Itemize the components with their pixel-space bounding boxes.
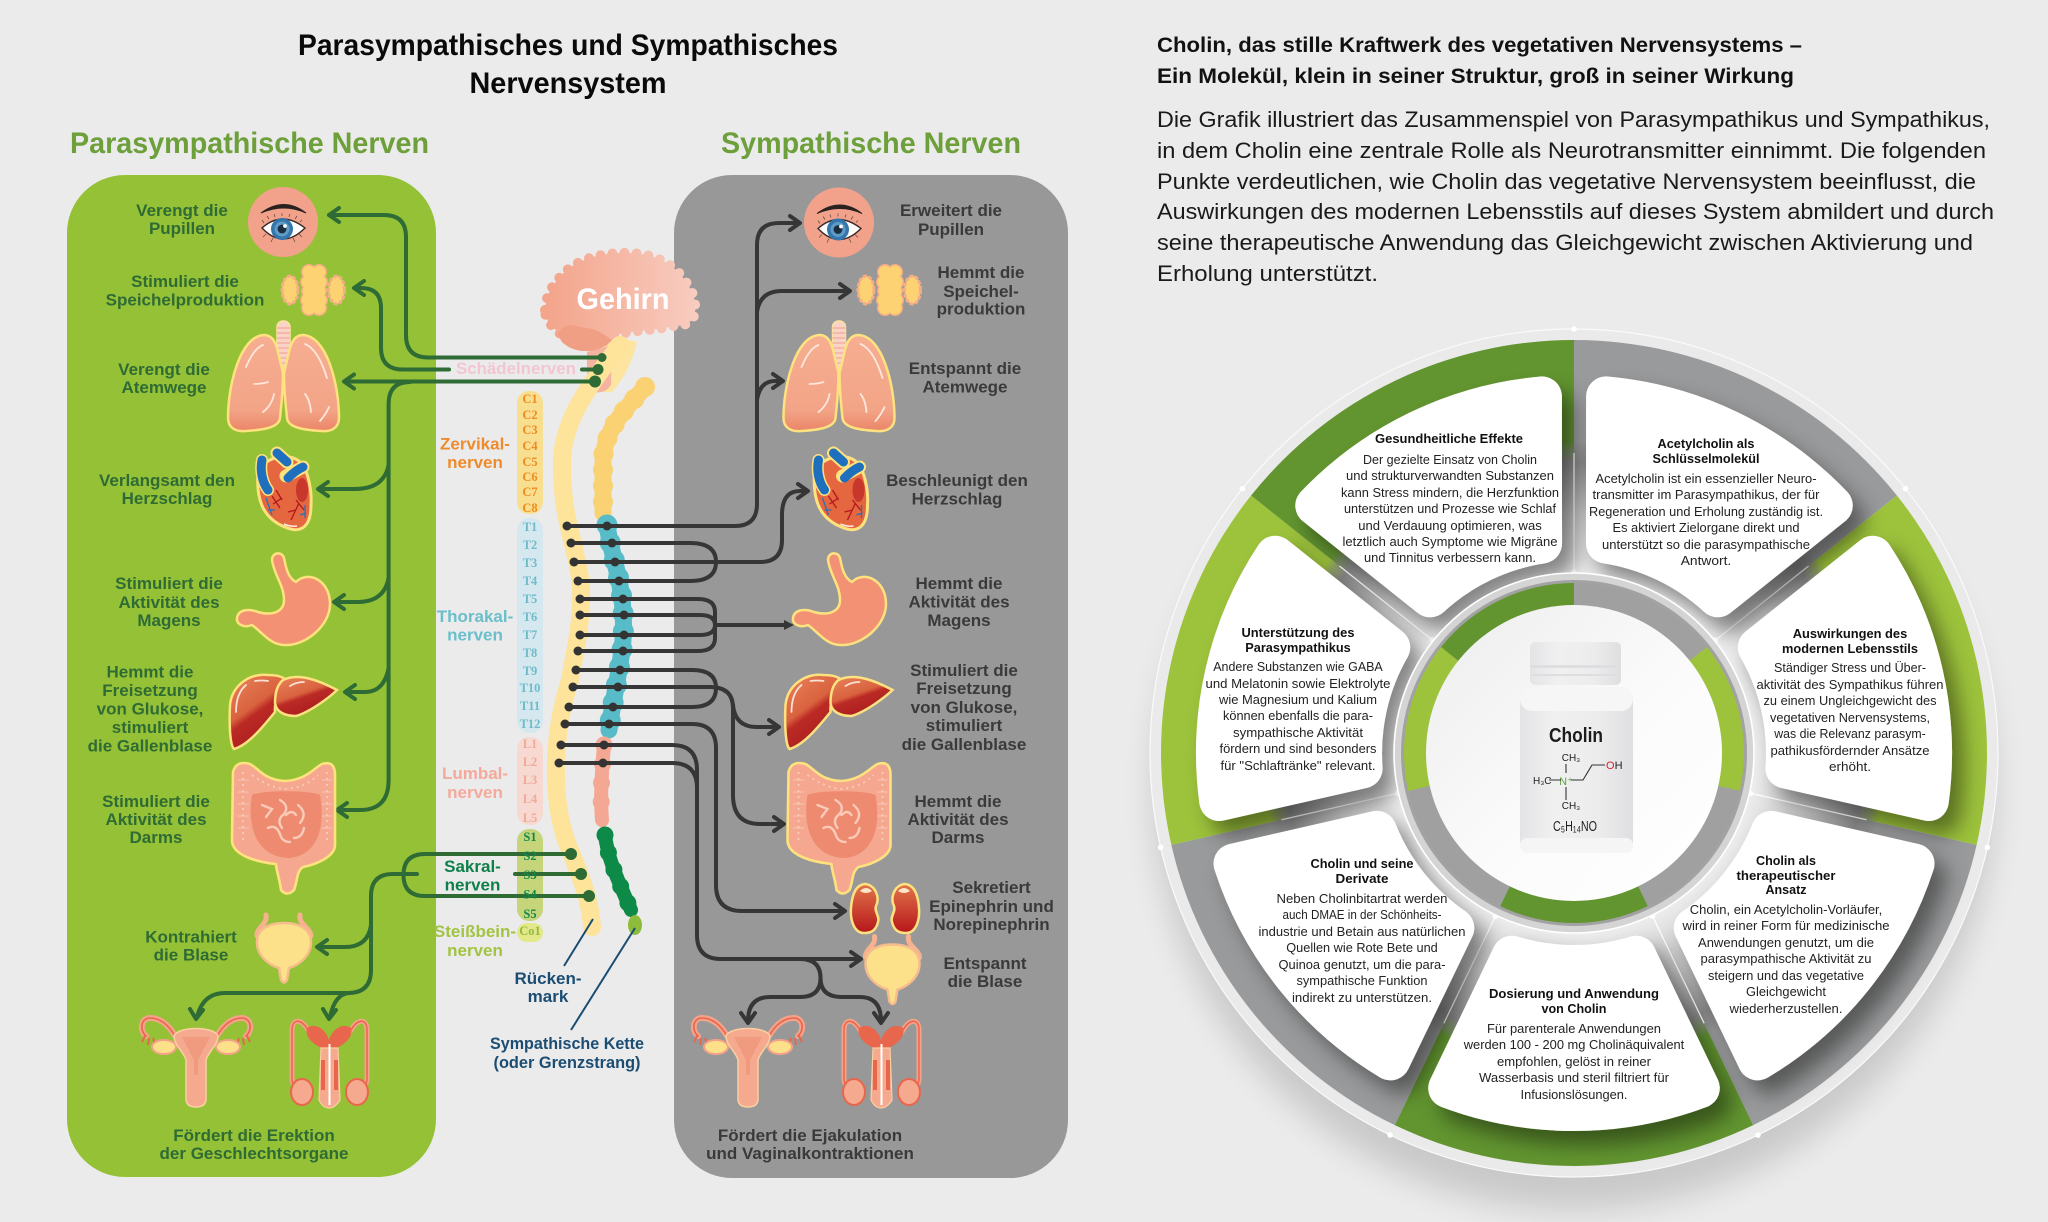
- organ: right stomach: [793, 553, 886, 645]
- card: Cholin als therapeutischer Ansatz: Gleichgewicht: [1746, 984, 1826, 999]
- organ: right eye: [804, 188, 874, 258]
- intro paragraph: Die Grafik illustriert das Zusammenspiel von Parasympathikus und Sympathikus,: [1157, 107, 1990, 132]
- wheel shadow: [1154, 370, 1994, 1210]
- block: thoracic segments: T11: [520, 699, 540, 713]
- card: Cholin und seine Derivate: Quinoa genutzt, um die para-: [1278, 957, 1446, 972]
- card: Auswirkungen: pathikusfördernder Ansätze: [1770, 743, 1930, 758]
- card: Cholin und seine Derivate: indirekt zu unterstützen.: [1292, 990, 1432, 1005]
- card: Dosierung: Dosierung und Anwendung: [1489, 986, 1659, 1001]
- label: Hemmt Speichelproduktion: Hemmt die: [938, 263, 1024, 282]
- block: cervical segments: C6: [522, 470, 538, 484]
- sympathetic branch: saliva: [757, 284, 850, 312]
- card: Dosierung: Infusionslösungen.: [1520, 1087, 1628, 1102]
- label: Steißbeinnerven: Steißbein-: [434, 922, 516, 941]
- card: Unterstützung: Unterstützung des: [1242, 625, 1354, 640]
- organ: left eye: [248, 187, 318, 257]
- label: Stimuliert Magen: Magens: [137, 611, 201, 630]
- intro paragraph: seine therapeutische Anwendung das Gleichgewicht zwischen Aktivierung und: [1157, 230, 1973, 255]
- block: thoracic segments: T4: [523, 574, 538, 588]
- label: Stimuliert Darm: Darms: [130, 828, 182, 847]
- label: Hemmt Glukose: von Glukose,: [97, 699, 203, 718]
- sympathetic chain: thoracic: [607, 525, 623, 730]
- block: thoracic segments: T1: [523, 520, 537, 534]
- organ: right intestine: [788, 763, 890, 894]
- sympathetic loop: T5-T8: [578, 599, 715, 651]
- organ: right salivary glands: [858, 264, 920, 316]
- sympathetic loop: T9-T11: [569, 670, 716, 707]
- label: Hemmt Darm: Darms: [932, 828, 984, 847]
- label: Fördert die Erektion: Fördert die Erektion: [173, 1126, 335, 1145]
- label: Lumbalnerven: nerven: [447, 783, 503, 802]
- card: Dosierung: von Cholin: [1542, 1001, 1607, 1016]
- intro paragraph: Punkte verdeutlichen, wie Cholin das vegetative Nervensystem beeinflusst, die: [1157, 169, 1976, 194]
- card: Gesundheitliche Effekte: Gesundheitliche Effekte: [1375, 431, 1523, 446]
- right heading: [1157, 34, 1802, 88]
- right labels: [706, 201, 1054, 1163]
- organ: right bladder: [865, 936, 920, 1004]
- card: Dosierung: [1463, 986, 1685, 1102]
- pointer: spinal cord: [564, 919, 593, 966]
- label: Sekretiert Epinephrin: Epinephrin und: [929, 897, 1054, 916]
- sympathetic nerve: T10 to intestine: [573, 687, 784, 831]
- label: Verengt die Atemwege: Atemwege: [121, 378, 207, 397]
- label: Lumbalnerven: Lumbal-: [442, 764, 508, 783]
- block: cervical segments: C4: [522, 439, 538, 453]
- hub ring: [1394, 573, 1754, 933]
- pointer: sympathetic chain: [571, 928, 635, 1030]
- block: cervical segments: C2: [522, 408, 538, 422]
- segment labels: sacral: [519, 830, 541, 938]
- card: Acetylcholin: Regeneration und Erholung zuständig ist.: [1589, 504, 1823, 519]
- organ: right liver: [785, 675, 892, 749]
- label: Stimuliert Glukose: Stimuliert die: [910, 661, 1018, 680]
- card: Auswirkungen: modernen Lebensstils: [1782, 641, 1918, 656]
- hub shadow: [1401, 580, 1747, 926]
- card: Acetylcholin: transmitter im Parasympathikus, der für: [1592, 487, 1820, 502]
- sympathetic loop: T2-T4: [571, 543, 716, 581]
- label: Hemmt Glukose: die Gallenblase: [88, 737, 212, 756]
- wheel channels: [1262, 441, 1886, 1065]
- card: Cholin und seine Derivate: Neben Cholinbitartrat werden: [1276, 891, 1448, 906]
- label: Entspannt die Atemwege: Entspannt die: [909, 359, 1021, 378]
- label: Thorakalnerven: nerven: [447, 626, 503, 645]
- block: thoracic segments: T6: [523, 610, 537, 624]
- sympathetic branch: liver: [733, 705, 779, 734]
- block: lumbar segments: [517, 737, 543, 825]
- parasympathetic branch: stomach: [334, 578, 389, 609]
- label: Sympathische Kette: [490, 1034, 644, 1072]
- card: Acetylcholin: Es aktiviert Zielorgane direkt und: [1612, 520, 1800, 535]
- title: Parasympathisches und Sympathisches: [298, 29, 838, 62]
- label: Kontrahiert die Blase: Kontrahiert: [145, 928, 237, 946]
- wheel cards: [1197, 376, 1951, 1111]
- bottle label: Cholin: Cholin: [1549, 725, 1603, 747]
- choline structure: CH₃: [1562, 753, 1580, 764]
- card: Unterstützung: wie Magnesium und Kalium: [1218, 692, 1377, 707]
- segment labels: sacral: S1: [523, 830, 537, 844]
- label: Verengt die Pupillen: Pupillen: [149, 219, 215, 238]
- sacral branch: male organ: [323, 993, 350, 1019]
- right heading: Cholin, das stille Kraftwerk des vegetativen Nervensystems –: [1157, 34, 1802, 57]
- sympathetic chain: sacral: [605, 835, 631, 910]
- label: Zervikalnerven: Zervikal-: [440, 434, 510, 454]
- label: Verlangsamt den Herzschlag: Herzschlag: [122, 489, 212, 508]
- label: Fördert die Erektion: der Geschlechtsorgane: [160, 1144, 348, 1163]
- block: thoracic segments: [517, 518, 543, 733]
- intro paragraph: in dem Cholin eine zentrale Rolle als Neurotransmitter einnimmt. Die folgenden: [1157, 138, 1986, 163]
- label: Sympathische Kette: (oder Grenzstrang): [494, 1053, 640, 1072]
- label: Rückenmark: Rücken-: [514, 969, 582, 988]
- block: cervical segments: C8: [522, 501, 538, 515]
- card: Cholin als therapeutischer Ansatz: parasympathische Aktivität zu: [1700, 951, 1872, 966]
- label: Fördert die Ejakulation: Fördert die Ejakulation: [718, 1126, 902, 1145]
- organ: left uterus: [142, 1018, 250, 1107]
- organ: left male reproductive organs: [291, 1021, 368, 1108]
- card: Auswirkungen: erhöht.: [1829, 759, 1871, 774]
- sympathetic nerve: T3 to heart: [574, 484, 808, 562]
- card: Acetylcholin: Acetylcholin ist ein essenzieller Neuro-: [1596, 471, 1816, 486]
- block: thoracic segments: T10: [520, 681, 540, 695]
- label: Stimuliert die Speichelproduktion: Speichelproduktion: [106, 290, 264, 310]
- heading: parasympathetic nerves: Parasympathische Nerven: [70, 127, 429, 160]
- label: Sekretiert Epinephrin: Norepinephrin: [933, 915, 1050, 934]
- card: Cholin und seine Derivate: sympathische Funktion: [1296, 973, 1428, 988]
- sympathetic chain: ganglion impar: [628, 915, 642, 935]
- label: Stimuliert Darm: Stimuliert die: [102, 792, 210, 811]
- card: Cholin als therapeutischer Ansatz: wiederherzustellen.: [1728, 1001, 1842, 1016]
- sacral nerve dots: [566, 848, 594, 902]
- card: Cholin als therapeutischer Ansatz: steigern und das vegetative: [1708, 968, 1864, 983]
- card: Gesundheitliche Effekte: unterstützen und Prozesse wie Schlaf: [1344, 501, 1556, 516]
- icon: brain: [545, 253, 695, 392]
- wheel diagram: [1099, 243, 2048, 1222]
- sympathetic nerve: to stomach: [715, 620, 794, 630]
- segment labels: sacral: S2: [523, 849, 537, 863]
- sympathetic branch: male organ: [820, 978, 888, 1023]
- block: cervical segments: C7: [522, 485, 538, 499]
- card: Cholin als therapeutischer Ansatz: Cholin als: [1756, 853, 1816, 868]
- segment labels: sacral: S5: [523, 907, 537, 921]
- label: Stimuliert Darm: Aktivität des: [105, 810, 207, 829]
- organ: left heart: [258, 453, 311, 530]
- label: Stimuliert Magen: Stimuliert die: [115, 574, 223, 593]
- block: thoracic segments: T5: [523, 592, 537, 606]
- card: Auswirkungen: [1756, 626, 1944, 774]
- choline structure: [1533, 753, 1623, 812]
- card: Cholin und seine Derivate: Quellen wie Rote Bete und: [1286, 940, 1438, 955]
- block: thoracic segments: T9: [523, 664, 537, 678]
- organ: left bladder: [257, 915, 311, 982]
- hub segments: [1379, 543, 1790, 964]
- organ: left lungs: [228, 321, 339, 431]
- label: Thorakalnerven: Thorakal-: [437, 607, 513, 626]
- intro paragraph: Erholung unterstützt.: [1157, 261, 1378, 286]
- choline structure: H₃C: [1533, 776, 1552, 787]
- card: Dosierung: Für parenterale Anwendungen: [1487, 1021, 1661, 1036]
- card: Gesundheitliche Effekte: und Verdauung optimieren, was: [1358, 518, 1542, 533]
- card: Unterstützung: für "Schlaftränke" relevant.: [1220, 758, 1376, 773]
- card: Unterstützung: können ebenfalls die para-: [1223, 708, 1373, 723]
- wheel spokes: [1157, 326, 1991, 1139]
- label: Sympathische Kette: Sympathische Kette: [490, 1034, 644, 1053]
- card: Unterstützung: [1206, 625, 1390, 773]
- sympathetic nerve: T1 to pupils: [567, 216, 800, 526]
- organ: right male reproductive organs: [843, 1021, 920, 1108]
- label: Sekretiert Epinephrin: Sekretiert: [952, 878, 1031, 897]
- block: lumbar segments: L5: [523, 811, 537, 825]
- card: Unterstützung: sympathische Aktivität: [1233, 725, 1363, 740]
- card: Auswirkungen: aktivität des Sympathikus führen: [1756, 677, 1944, 692]
- segment labels: sacral: Co1: [519, 924, 541, 938]
- parasympathetic nerve: airways: [344, 374, 595, 388]
- sacral nerve: S3 stub: [515, 872, 581, 876]
- organ: right uterus: [694, 1018, 802, 1107]
- block: thoracic segments: T3: [523, 556, 537, 570]
- label: Stimuliert Glukose: Freisetzung: [916, 679, 1012, 698]
- label: Verlangsamt den Herzschlag: Verlangsamt den: [99, 471, 235, 490]
- sacral nerves: loop: [404, 854, 589, 896]
- hub center: [1426, 605, 1722, 901]
- label: Hemmt Glukose: Freisetzung: [102, 681, 198, 700]
- block: thoracic segments: T2: [523, 538, 537, 552]
- label: Beschleunigt den Herzschlag: Beschleunigt den: [886, 471, 1028, 490]
- label: Erweitert die Pupillen: Erweitert die: [900, 201, 1002, 220]
- wheel outer ring: [1150, 329, 1998, 1177]
- card: Dosierung: empfohlen, gelöst in reiner: [1497, 1054, 1652, 1069]
- card: Acetylcholin: [1589, 436, 1823, 568]
- block: lumbar segments: L1: [523, 737, 537, 751]
- sympathetic branch: airways: [757, 374, 783, 400]
- wheel band segments: [1099, 243, 2048, 1222]
- card: Cholin als therapeutischer Ansatz: Anwendungen genutzt, um die: [1698, 935, 1874, 950]
- label: Stimuliert Glukose: stimuliert: [926, 716, 1003, 735]
- block: cervical segments: C1: [522, 392, 538, 406]
- label: Hemmt Magen: Hemmt die: [916, 574, 1002, 593]
- label: Hemmt Speichelproduktion: Speichel-: [943, 282, 1019, 301]
- formula: C₅H₁₄NO: [1553, 818, 1597, 835]
- card: Gesundheitliche Effekte: und Tinnitus verbessern kann.: [1364, 550, 1536, 565]
- block: lumbar segments: L4: [523, 792, 538, 806]
- label: Hemmt Glukose: Hemmt die: [107, 663, 193, 682]
- sympathetic nerve: L2 to bladder: [559, 763, 861, 966]
- block: lumbar segments: L3: [523, 773, 537, 787]
- card: Unterstützung: und Melatonin sowie Elektrolyte: [1206, 676, 1390, 691]
- sympathetic branch: uterus: [741, 959, 820, 1023]
- card: Auswirkungen: was die Relevanz parasym-: [1773, 726, 1926, 741]
- label: Hemmt Glukose: stimuliert: [112, 718, 189, 737]
- card: Cholin und seine Derivate: Derivate: [1336, 871, 1388, 886]
- sympathetic nerve dots: [554, 522, 628, 768]
- card: Cholin und seine Derivate: industrie und Betain aus natürlichen: [1258, 924, 1466, 939]
- card: Acetylcholin: Acetylcholin als: [1658, 436, 1754, 451]
- block: cervical segments: C3: [522, 423, 538, 437]
- card: Gesundheitliche Effekte: [1341, 431, 1559, 565]
- choline structure: OH: [1606, 760, 1623, 772]
- card: Unterstützung: Parasympathikus: [1245, 640, 1351, 655]
- label: Stimuliert die Speichelproduktion: Stimuliert die: [131, 272, 239, 291]
- block: cervical segments: C5: [522, 455, 538, 469]
- panel: parasympathetic: [67, 175, 436, 1177]
- sympathetic nerve: T12 to adrenal: [565, 724, 845, 918]
- card: Auswirkungen: vegetativen Nervensystems,: [1770, 710, 1930, 725]
- card: Cholin als therapeutischer Ansatz: Ansatz: [1766, 882, 1807, 897]
- label: Erweitert die Pupillen: Pupillen: [918, 220, 984, 239]
- title: [298, 29, 838, 100]
- card: Gesundheitliche Effekte: letztlich auch Symptome wie Migräne: [1342, 534, 1558, 549]
- card: Cholin als therapeutischer Ansatz: therapeutischer: [1736, 868, 1836, 883]
- sympathetic nerve: L1: [561, 745, 697, 800]
- parasympathetic nerve: pupils: [329, 208, 602, 358]
- label: Stimuliert Glukose: die Gallenblase: [902, 735, 1026, 754]
- label: Gehirn: Gehirn: [576, 283, 670, 316]
- spinal cord: [556, 345, 620, 927]
- block: sacral segments: [517, 829, 543, 942]
- parasympathetic nerve: saliva: [354, 281, 598, 370]
- card: Auswirkungen: Ständiger Stress und Über-: [1774, 660, 1926, 675]
- label: Stimuliert Glukose: von Glukose,: [911, 698, 1017, 717]
- label: Beschleunigt den Herzschlag: Herzschlag: [912, 490, 1002, 509]
- label: Sakralnerven: Sakral-: [444, 857, 501, 876]
- label: Hemmt Magen: Aktivität des: [908, 592, 1010, 612]
- card: Cholin als therapeutischer Ansatz: [1681, 853, 1890, 1016]
- card: Unterstützung: Andere Substanzen wie GABA: [1213, 659, 1383, 674]
- choline structure: CH₃: [1562, 801, 1580, 812]
- heading: sympathetic nerves: Sympathische Nerven: [721, 127, 1021, 160]
- sacral nerve: to pelvis: [190, 874, 417, 1019]
- card: Cholin und seine Derivate: Cholin und seine: [1310, 856, 1414, 871]
- organ: left stomach: [237, 553, 330, 645]
- label: Hemmt Darm: Hemmt die: [915, 792, 1001, 811]
- parasympathetic branch: liver: [345, 668, 389, 699]
- card: Gesundheitliche Effekte: und strukturverwandten Substanzen: [1346, 468, 1554, 483]
- left labels: [88, 201, 348, 1163]
- label: Schädelnerven: Schädelnerven: [456, 359, 576, 378]
- intro paragraph: Auswirkungen des modernen Lebensstils auf dieses System abmildert und durch: [1157, 199, 1994, 224]
- title: Nervensystem: [470, 67, 666, 100]
- card: Gesundheitliche Effekte: kann Stress mindern, die Herzfunktion: [1341, 485, 1559, 500]
- parasympathetic nerve dots: cranial: [589, 353, 606, 388]
- organ: right lungs: [784, 321, 894, 431]
- segment labels: sacral: S4: [523, 888, 537, 902]
- card: Unterstützung: fördern und sind besonders: [1220, 741, 1377, 756]
- organ: right heart: [814, 453, 868, 530]
- organ: left salivary glands: [282, 264, 344, 316]
- block: thoracic segments: T8: [523, 646, 537, 660]
- label: Hemmt Darm: Aktivität des: [907, 810, 1009, 829]
- card: Dosierung: Wasserbasis und steril filtriert für: [1479, 1070, 1670, 1085]
- label: Entspannt die Blase: Entspannt: [943, 954, 1027, 973]
- label: Sakralnerven: nerven: [445, 876, 500, 895]
- label: Zervikalnerven: nerven: [447, 453, 503, 472]
- choline structure: N⁺: [1559, 776, 1573, 788]
- panel: sympathetic: [674, 175, 1068, 1178]
- label: Hemmt Speichelproduktion: produktion: [937, 300, 1025, 319]
- label: Rückenmark: mark: [528, 987, 569, 1006]
- card: Cholin und seine Derivate: [1258, 856, 1466, 1005]
- bottle: [1520, 642, 1633, 853]
- card: Gesundheitliche Effekte: Der gezielte Einsatz von Cholin: [1363, 452, 1537, 467]
- card: Cholin als therapeutischer Ansatz: Cholin, ein Acetylcholin-Vorläufer,: [1690, 902, 1882, 917]
- sympathetic chain: lumbar: [601, 745, 604, 820]
- card: Acetylcholin: Antwort.: [1681, 553, 1731, 568]
- label: Kontrahiert die Blase: die Blase: [154, 946, 228, 964]
- intro paragraph: [1157, 107, 1994, 286]
- segment labels: sacral: S3: [523, 868, 537, 882]
- label: Stimuliert Magen: Aktivität des: [118, 593, 220, 612]
- sympathetic loop: T6-T7: [580, 615, 715, 635]
- parasympathetic branch: heart: [318, 465, 389, 496]
- block: lumbar segments: L2: [523, 755, 537, 769]
- block: cervical segments: [517, 391, 543, 515]
- sacral branch: bladder: [317, 925, 371, 954]
- label: Steißbeinnerven: nerven: [447, 941, 503, 960]
- organ: kidneys: [851, 884, 919, 933]
- parasympathetic trunk: intestine: [337, 382, 410, 817]
- sympathetic chain: cervical: [603, 387, 645, 513]
- block: thoracic segments: T12: [520, 717, 540, 731]
- card: Acetylcholin: Schlüsselmolekül: [1652, 451, 1760, 466]
- card: Auswirkungen: zu einem Ungleichgewicht des: [1764, 693, 1937, 708]
- label: Hemmt Magen: Magens: [927, 611, 991, 630]
- card: Dosierung: werden 100 - 200 mg Cholinäquivalent: [1463, 1037, 1685, 1052]
- card: Cholin als therapeutischer Ansatz: wird in reiner Form für medizinische: [1681, 918, 1890, 933]
- label: Fördert die Ejakulation: und Vaginalkontraktionen: [706, 1144, 914, 1163]
- label: Entspannt die Blase: die Blase: [948, 972, 1022, 991]
- label: Entspannt die Atemwege: Atemwege: [922, 378, 1008, 396]
- card: Acetylcholin: unterstützt so die parasympathische: [1602, 537, 1810, 552]
- card: Cholin und seine Derivate: auch DMAE in der Schönheits-: [1282, 907, 1442, 922]
- card: Auswirkungen: Auswirkungen des: [1793, 626, 1907, 641]
- organ: left intestine: [232, 763, 335, 894]
- organ: left liver: [230, 675, 337, 749]
- label: Verengt die Pupillen: Verengt die: [136, 201, 228, 220]
- right heading: Ein Molekül, klein in seiner Struktur, groß in seiner Wirkung: [1157, 65, 1794, 88]
- label: Verengt die Atemwege: Verengt die: [118, 360, 210, 379]
- block: thoracic segments: T7: [523, 628, 537, 642]
